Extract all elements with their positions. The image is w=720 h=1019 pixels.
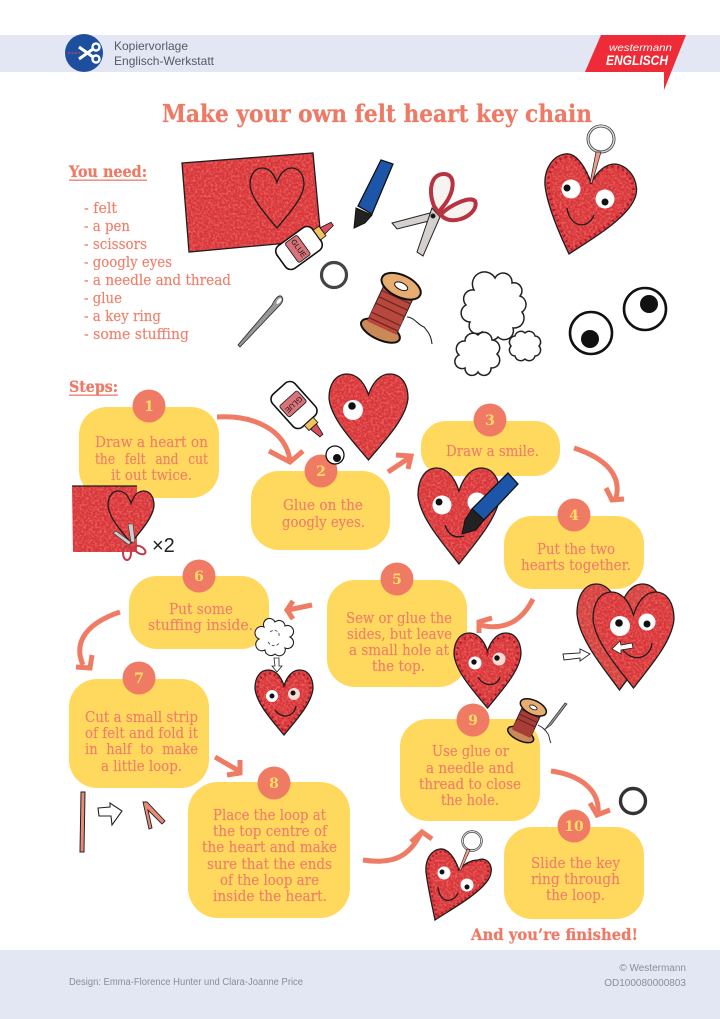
step 8: 8 [269, 776, 279, 792]
step 9 [400, 704, 540, 821]
icon: pen [354, 160, 393, 228]
step 4: 4 [569, 508, 579, 524]
step 7: of felt and fold it [85, 726, 198, 742]
step 3: 3 [485, 413, 495, 429]
arrow: step 3 to 4 [574, 448, 624, 500]
step 8: the heart and make [202, 840, 337, 856]
icon: felt being cut, times two [72, 486, 175, 560]
step 10: 10 [564, 819, 584, 835]
icon: scissors [392, 174, 476, 256]
step 1: the felt and cut [95, 452, 208, 468]
materials list: - a key ring [84, 309, 161, 325]
icon: key ring [322, 262, 346, 288]
icon: felt strip folded into loop [80, 792, 165, 852]
icon: felt sheet with heart [182, 153, 321, 252]
header text: Kopiervorlage [114, 39, 188, 53]
icon: heart with one eye [329, 374, 408, 460]
arrow: step 5 to 6 [287, 601, 312, 619]
heading: you need: You need: [68, 162, 147, 181]
step 7: in half to make [85, 742, 198, 758]
icon: key chain heart near step 9 [426, 832, 491, 920]
icon: glue bottle: GLUE [289, 237, 308, 259]
arrow: step 2 to 3 [388, 455, 411, 472]
step 6: 6 [194, 569, 204, 585]
icon: finished key chain heart [545, 126, 637, 254]
step 7: 7 [134, 671, 144, 687]
step 4: hearts together. [521, 558, 631, 574]
arrow: step 6 to 7 [76, 612, 120, 668]
step 7: a little loop. [101, 759, 182, 775]
arrow: step 4 to 5 [479, 599, 533, 633]
icon: two hearts together [563, 584, 674, 690]
icon: stuffing clouds [455, 272, 541, 375]
step 2: googly eyes. [282, 515, 365, 531]
arrow: step 1 to 2 [217, 417, 303, 462]
icon: glue bottle for step 2 [268, 379, 333, 446]
title: Make your own felt heart key chain [162, 99, 592, 128]
materials list: - googly eyes [84, 255, 172, 271]
copyright: OD100080000803 [604, 978, 686, 989]
materials list: - some stuffing [84, 327, 189, 343]
label: times two: ×2 [152, 535, 175, 557]
step 1: 1 [144, 399, 154, 415]
publisher flag [585, 35, 686, 90]
icon: googly eyes [570, 288, 666, 354]
materials list: - felt [84, 201, 117, 217]
step 5: the top. [372, 659, 425, 675]
step 10: the loop. [546, 888, 605, 904]
footer band [0, 950, 720, 1019]
icon: stitched heart for step 5 [454, 633, 521, 708]
closing message: And you’re finished! [470, 925, 638, 944]
icon: googly eye for step 2 [326, 446, 344, 464]
arrow: step 7 to 8 [215, 757, 240, 775]
step 3: Draw a smile. [446, 444, 539, 460]
step 9: Use glue or [432, 744, 509, 760]
header text: Englisch-Werkstatt [114, 54, 215, 68]
step 5 [327, 562, 467, 687]
step 10: Slide the key [531, 856, 621, 872]
step 6: Put some [169, 602, 233, 618]
step 1 [79, 390, 219, 498]
step 2: Glue on the [283, 498, 363, 514]
header text [114, 39, 215, 68]
publisher flag: ENGLISCH [606, 53, 668, 68]
icon: glue bottle [273, 213, 340, 272]
icon: needle [238, 296, 283, 347]
step 8: sure that the ends [207, 857, 332, 873]
step 4: Put the two [537, 542, 615, 558]
materials list: - a pen [84, 219, 130, 235]
design credit: Design: Emma-Florence Hunter und Clara-Joanne Price [69, 977, 303, 988]
step 8: Place the loop at [213, 808, 326, 824]
step 9: 9 [468, 713, 478, 729]
step 8: of the loop are [220, 873, 319, 889]
materials list: - scissors [84, 237, 147, 253]
arrow: step 8 to 9 [363, 832, 432, 861]
step 5: 5 [392, 572, 402, 588]
publisher flag: westermann [609, 42, 672, 54]
arrow: step 9 to 10 [551, 771, 610, 815]
icon: key ring for step 10 [620, 788, 646, 814]
step 4 [504, 498, 644, 589]
step 2: 2 [316, 464, 326, 480]
step 1: Draw a heart on [95, 435, 208, 451]
materials list: - a needle and thread [84, 273, 231, 289]
step 7 [69, 662, 209, 788]
step 9: a needle and [426, 761, 514, 777]
step 8: inside the heart. [213, 889, 327, 905]
step 8: the top centre of [213, 824, 329, 840]
step 2 [251, 454, 390, 550]
icon: small spool and needle [505, 695, 567, 746]
step 6 [129, 560, 269, 649]
icon: stitched heart for step 6 [255, 670, 313, 735]
materials list [84, 201, 231, 343]
step 1: it out twice. [111, 468, 192, 484]
step 5: a small hole at [349, 643, 449, 659]
step 3 [421, 404, 560, 476]
step 7: Cut a small strip [85, 710, 198, 726]
icon: thread spool [358, 267, 432, 348]
step 6: stuffing inside. [148, 618, 253, 634]
step 5: sides, but leave [347, 627, 452, 643]
icon: stuffing and down arrow [255, 618, 294, 672]
copyright [604, 963, 686, 989]
step 9: the hole. [441, 793, 499, 809]
step 8 [188, 766, 350, 918]
heading: steps: Steps: [69, 377, 118, 396]
step 10 [504, 810, 644, 919]
icon: heart with pen drawing smile [418, 468, 518, 564]
step 9: thread to close [419, 777, 521, 793]
copyright: © Westermann [619, 963, 686, 974]
step 10: ring through [531, 872, 620, 888]
icon: glue bottle for step 2: GLUE [283, 394, 304, 415]
header band [0, 34, 720, 90]
materials list: - glue [84, 291, 122, 307]
step 5: Sew or glue the [346, 611, 452, 627]
icon: scissors logo [65, 34, 103, 72]
